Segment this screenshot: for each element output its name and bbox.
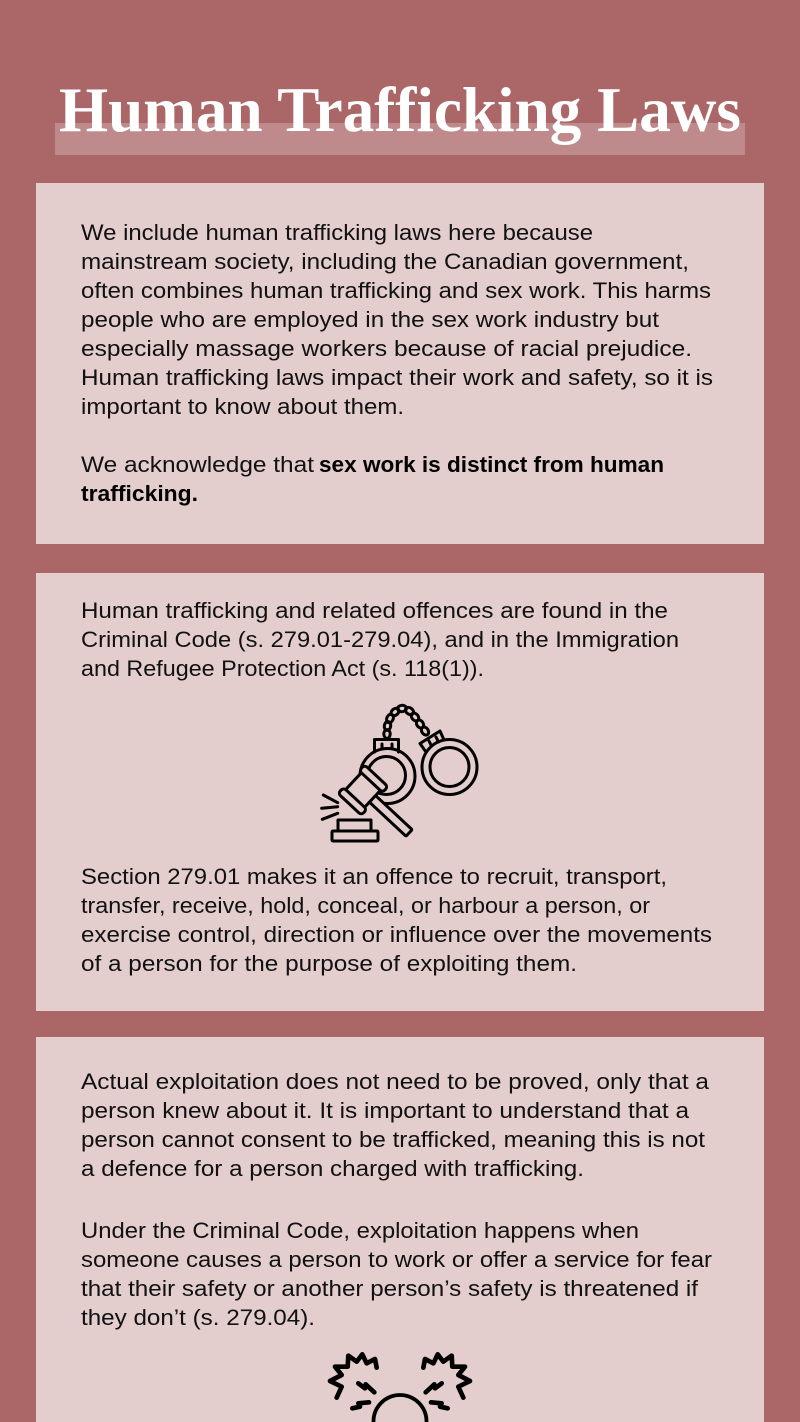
text: where offences are found: [81, 598, 679, 681]
icon: distressed head with bursts: [330, 1354, 470, 1422]
text: consent is not a defence: [81, 1069, 710, 1181]
icon: gavel and handcuffs: [322, 705, 477, 847]
text: section 279.01: of a person for the purpose of exploiting them.: [81, 951, 577, 976]
text: section 279.01: exercise control, direction or influence over the movements: [81, 922, 712, 947]
text: acknowledgement: [81, 452, 664, 506]
text: definition of exploitation: they don’t (s. 279.04).: [81, 1305, 315, 1330]
text: why trafficking laws are included: often combines human trafficking and sex work. This harms: [81, 278, 711, 303]
text: where offences are found: Criminal Code (s. 279.01-279.04), and in the Immigration: [81, 627, 679, 652]
text: definition of exploitation: [81, 1218, 712, 1330]
text: consent is not a defence: a defence for a person charged with trafficking.: [81, 1156, 584, 1181]
text: definition of exploitation: Under the Criminal Code, exploitation happens when: [81, 1218, 639, 1243]
text: where offences are found: and Refugee Protection Act (s. 118(1)).: [81, 656, 484, 681]
panel: exploitation and consent: [36, 1037, 764, 1422]
text: acknowledgement: trafficking.: [81, 481, 198, 506]
text: section 279.01: [81, 864, 712, 976]
panel: legal sections: [36, 573, 764, 1011]
text: definition of exploitation: someone causes a person to work or offer a service for fear: [81, 1247, 712, 1272]
panel: introduction: [36, 183, 764, 544]
text: why trafficking laws are included: especially massage workers because of racial prejudice.: [81, 336, 692, 361]
text: where offences are found: Human trafficking and related offences are found in the: [81, 598, 668, 623]
text: acknowledgement: We acknowledge that: [81, 452, 314, 477]
text: why trafficking laws are included: mainstream society, including the Canadian government,: [81, 249, 689, 274]
text: section 279.01: Section 279.01 makes it an offence to recruit, transport,: [81, 864, 667, 889]
text: why trafficking laws are included: [81, 220, 713, 419]
title highlight band: [55, 123, 745, 155]
title: Human Trafficking Laws: [59, 75, 741, 145]
text: why trafficking laws are included: We include human trafficking laws here because: [81, 220, 593, 245]
text: definition of exploitation: that their safety or another person’s safety is threatened if: [81, 1276, 699, 1301]
text: section 279.01: transfer, receive, hold, conceal, or harbour a person, or: [81, 893, 650, 918]
text: consent is not a defence: Actual exploitation does not need to be proved, only that a: [81, 1069, 710, 1094]
text: why trafficking laws are included: important to know about them.: [81, 394, 404, 419]
text: why trafficking laws are included: Human trafficking laws impact their work and safety, so it is: [81, 365, 713, 390]
text: consent is not a defence: person cannot consent to be trafficked, meaning this is not: [81, 1127, 705, 1152]
text: acknowledgement: sex work is distinct from human: [319, 452, 664, 477]
text: consent is not a defence: person knew about it. It is important to understand that a: [81, 1098, 690, 1123]
text: why trafficking laws are included: people who are employed in the sex work industry but: [81, 307, 659, 332]
